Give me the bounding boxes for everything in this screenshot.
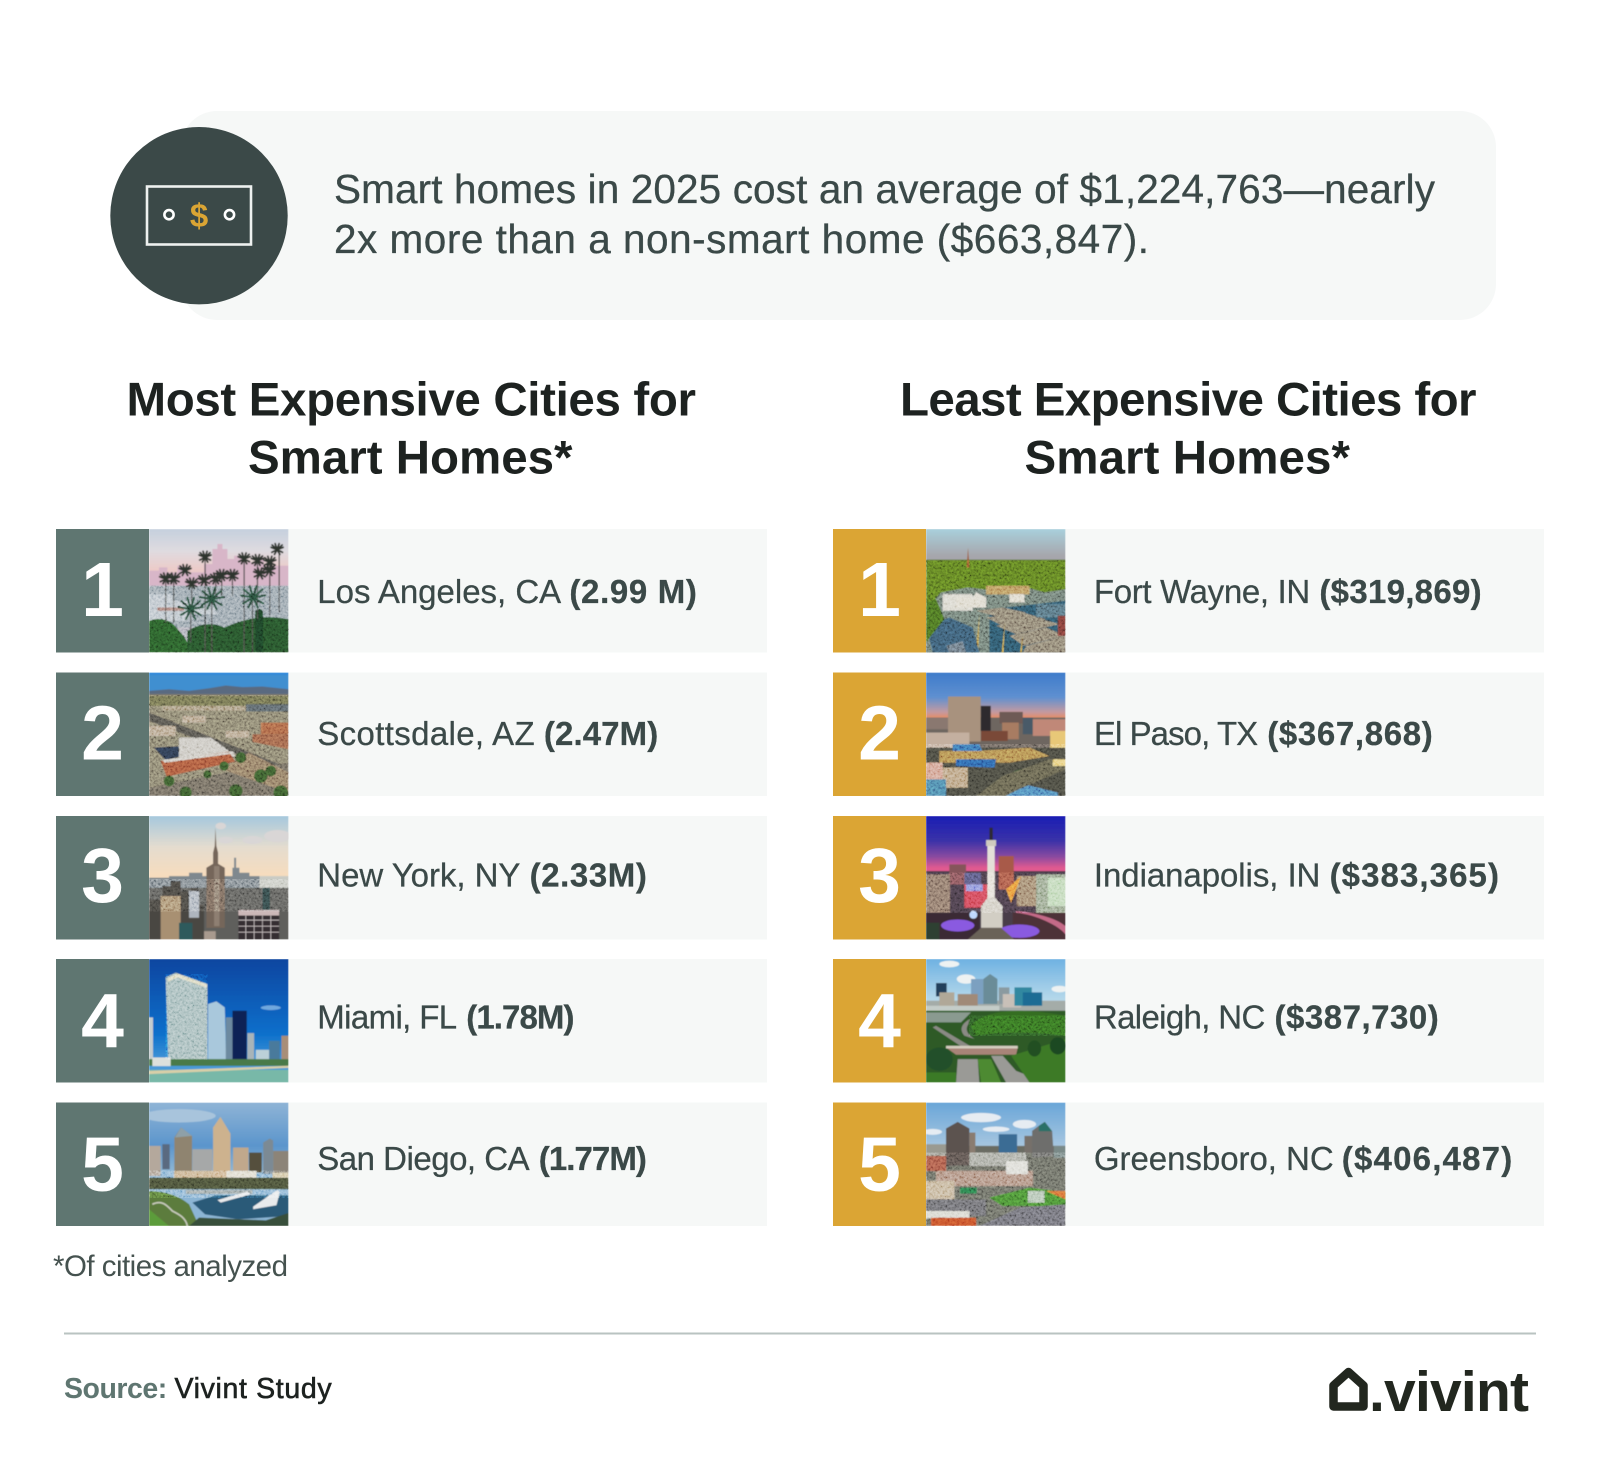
panel: most expensive list bbox=[56, 529, 767, 1226]
row: New York: 3 bbox=[81, 833, 124, 919]
row: Indianapolis: 3 bbox=[858, 833, 901, 919]
row: Scottsdale: (2.47M) bbox=[544, 715, 658, 752]
callout text bbox=[334, 166, 1436, 262]
row: San Diego: 5 bbox=[81, 1122, 124, 1208]
row: Los Angeles bbox=[56, 529, 767, 652]
row: Los Angeles: Los Angeles, CA bbox=[317, 573, 561, 610]
callout panel bbox=[181, 111, 1496, 320]
row: Scottsdale: 2 bbox=[81, 690, 124, 776]
callout text: Smart homes in 2025 cost an average of $1,224,763—nearly bbox=[334, 166, 1436, 212]
row: Greensboro: Greensboro, NC bbox=[1094, 1140, 1334, 1177]
row: Miami: (1.78M) bbox=[466, 998, 574, 1035]
row: Fort Wayne bbox=[833, 529, 1544, 659]
row: Indianapolis bbox=[833, 816, 1544, 940]
heading: least expensive: Smart Homes* bbox=[1024, 432, 1350, 484]
row: Raleigh: ($387,730) bbox=[1274, 998, 1439, 1035]
row: Greensboro: 5 bbox=[858, 1122, 901, 1208]
heading: most expensive bbox=[126, 374, 696, 484]
heading: most expensive: Smart Homes* bbox=[248, 432, 573, 484]
row: New York: New York, NY bbox=[317, 857, 520, 894]
row: San Diego: San Diego, CA bbox=[317, 1140, 530, 1177]
row: Raleigh: 4 bbox=[858, 978, 901, 1064]
row: Fort Wayne: ($319,869) bbox=[1319, 573, 1482, 610]
row: Indianapolis: ($383,365) bbox=[1330, 857, 1499, 894]
row: El Paso: El Paso, TX bbox=[1094, 715, 1258, 752]
row: Greensboro: ($406,487) bbox=[1342, 1140, 1512, 1177]
row: El Paso bbox=[833, 672, 1544, 796]
heading: least expensive: Least Expensive Cities for bbox=[900, 374, 1476, 426]
row: El Paso: ($367,868) bbox=[1267, 715, 1433, 752]
logo: vivint: .vivint bbox=[1369, 1360, 1529, 1424]
row: Scottsdale: Scottsdale, AZ bbox=[317, 715, 535, 752]
row: Los Angeles: (2.99 M) bbox=[569, 573, 697, 610]
row: Miami: 4 bbox=[81, 978, 124, 1064]
row: El Paso: 2 bbox=[858, 690, 901, 776]
row: Fort Wayne: Fort Wayne, IN bbox=[1094, 573, 1310, 610]
source: Vivint Study bbox=[174, 1373, 332, 1405]
icon: money bill in circle bbox=[110, 127, 288, 304]
panel: least expensive list bbox=[833, 529, 1544, 1226]
row: San Diego: (1.77M) bbox=[539, 1140, 647, 1177]
row: Miami bbox=[56, 959, 767, 1082]
row: Scottsdale bbox=[56, 672, 767, 800]
row: San Diego bbox=[56, 1102, 767, 1226]
row: Indianapolis: Indianapolis, IN bbox=[1094, 857, 1320, 894]
footnote: *Of cities analyzed bbox=[53, 1250, 288, 1283]
row: New York bbox=[56, 816, 767, 940]
heading: most expensive: Most Expensive Cities for bbox=[126, 374, 696, 426]
icon: money bill in circle: $ bbox=[190, 197, 208, 234]
heading: least expensive bbox=[900, 374, 1476, 484]
source: Source: bbox=[64, 1373, 167, 1405]
row: Raleigh: Raleigh, NC bbox=[1094, 998, 1265, 1035]
row: Raleigh bbox=[833, 959, 1544, 1082]
row: Miami: Miami, FL bbox=[317, 998, 457, 1035]
row: Fort Wayne: 1 bbox=[858, 547, 901, 633]
row: Los Angeles: 1 bbox=[81, 547, 124, 633]
row: New York: (2.33M) bbox=[530, 857, 647, 894]
row: Greensboro bbox=[833, 1102, 1544, 1226]
callout text: 2x more than a non-smart home ($663,847). bbox=[334, 216, 1149, 262]
